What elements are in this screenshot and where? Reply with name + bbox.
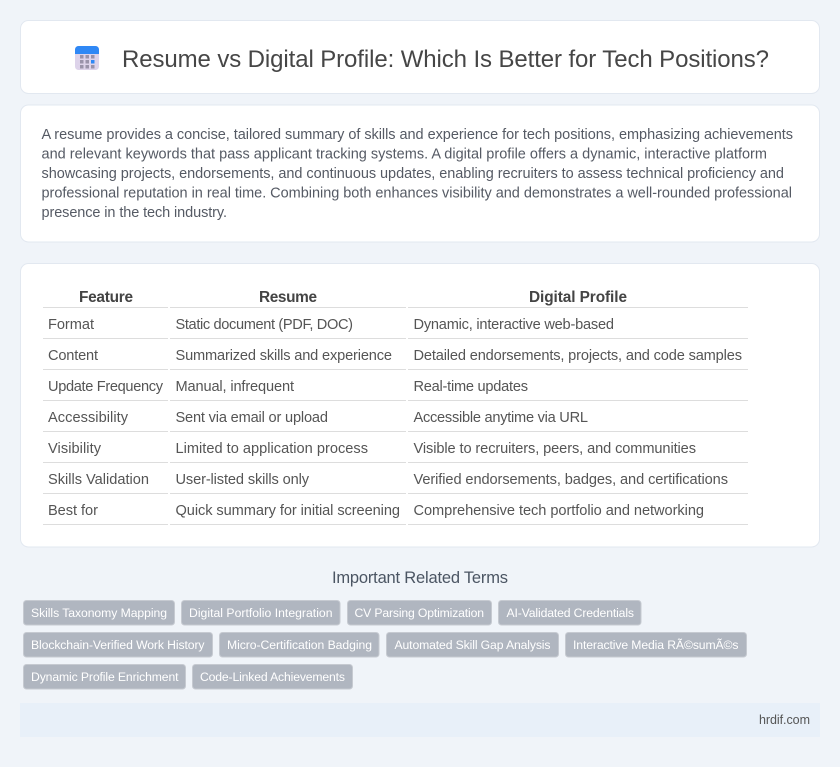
table row: Visibility: Limited to application process [176, 441, 368, 457]
table row: Best for [48, 503, 704, 519]
tag: CV Parsing Optimization [354, 606, 484, 620]
tag [348, 600, 492, 625]
tag: Code-Linked Achievements [200, 670, 345, 684]
table row: Update Frequency [48, 379, 528, 395]
table row: Accessibility: Accessible anytime via URL [414, 410, 588, 426]
panel: description [20, 105, 820, 242]
table row: Visibility: Visible to recruiters, peers, and communities [414, 441, 696, 457]
tag: AI-Validated Credentials [506, 606, 634, 620]
text block: summary paragraph [42, 127, 793, 221]
title: Resume vs Digital Profile: Which Is Better for Tech Positions? [122, 46, 769, 73]
table row: Content: Detailed endorsements, projects, and code samples [414, 348, 742, 364]
tag: Dynamic Profile Enrichment [31, 670, 179, 684]
tag [498, 600, 641, 625]
table row: Accessibility [48, 410, 588, 426]
table row: Best for: Quick summary for initial screening [176, 503, 400, 519]
panel: related term tags [24, 600, 746, 689]
table row: Visibility [48, 441, 696, 457]
table row: Update Frequency: Update Frequency [48, 379, 164, 395]
table row: Skills Validation: User-listed skills only [176, 472, 310, 488]
table row: Format: Format [48, 317, 94, 333]
table row: Best for: Comprehensive tech portfolio and networking [414, 503, 704, 519]
footer: hrdif.com [759, 713, 810, 727]
table row: Content: Content [48, 348, 98, 364]
table row: Visibility: Visibility [48, 441, 102, 457]
tag [24, 632, 212, 657]
tag [566, 632, 746, 657]
table row: Format [48, 317, 614, 333]
tag [182, 600, 340, 625]
table row: Content [48, 348, 742, 364]
text block: summary paragraph: showcasing projects, endorsements, and continuous updates, enabling recruiters to assess technical proficiency and [42, 166, 784, 182]
tag: Interactive Media RÃ©sumÃ©s [573, 638, 738, 652]
table row: Update Frequency: Manual, infrequent [176, 379, 294, 395]
panel: comparison table [20, 264, 820, 547]
table row: Format: Static document (PDF, DOC) [176, 317, 353, 333]
table row: Format: Dynamic, interactive web-based [414, 317, 614, 333]
table row: Skills Validation [48, 472, 728, 488]
heading: important related terms: Important Related Terms [332, 569, 508, 587]
text block: summary paragraph: and relevant keywords that pass applicant tracking systems. A digital profile offers a dynamic, interactive platform [42, 146, 767, 162]
table row: Content: Summarized skills and experience [176, 348, 392, 364]
table row: Update Frequency: Real-time updates [414, 379, 528, 395]
table header row: Resume [259, 289, 317, 306]
tag: Skills Taxonomy Mapping [31, 606, 167, 620]
tag: Micro-Certification Badging [227, 638, 372, 652]
tag [220, 632, 379, 657]
table row: Accessibility: Accessibility [48, 410, 129, 426]
text block: summary paragraph: presence in the tech industry. [42, 205, 227, 221]
tag: Digital Portfolio Integration [189, 606, 332, 620]
tag [386, 632, 558, 657]
icon: calendar [75, 46, 99, 70]
tag [192, 664, 352, 689]
tag [24, 600, 174, 625]
table header row: Digital Profile [529, 289, 627, 306]
table row: Skills Validation: Verified endorsements, badges, and certifications [414, 472, 728, 488]
text block: summary paragraph: professional reputation in real time. Combining both enhances visibility and demonstrates a well-rounded professional [42, 186, 792, 202]
table row: Accessibility: Sent via email or upload [176, 410, 328, 426]
table header row: Feature [79, 289, 133, 306]
table row: Best for: Best for [48, 503, 98, 519]
table row: Skills Validation: Skills Validation [48, 472, 149, 488]
footer [20, 703, 820, 737]
tag: Blockchain-Verified Work History [31, 638, 205, 652]
tag: Automated Skill Gap Analysis [394, 638, 550, 652]
tag [24, 664, 186, 689]
table header row [79, 289, 627, 306]
text block: summary paragraph: A resume provides a concise, tailored summary of skills and experience for tech positions, emphasizing achievements [42, 127, 793, 143]
panel: header [20, 20, 820, 94]
